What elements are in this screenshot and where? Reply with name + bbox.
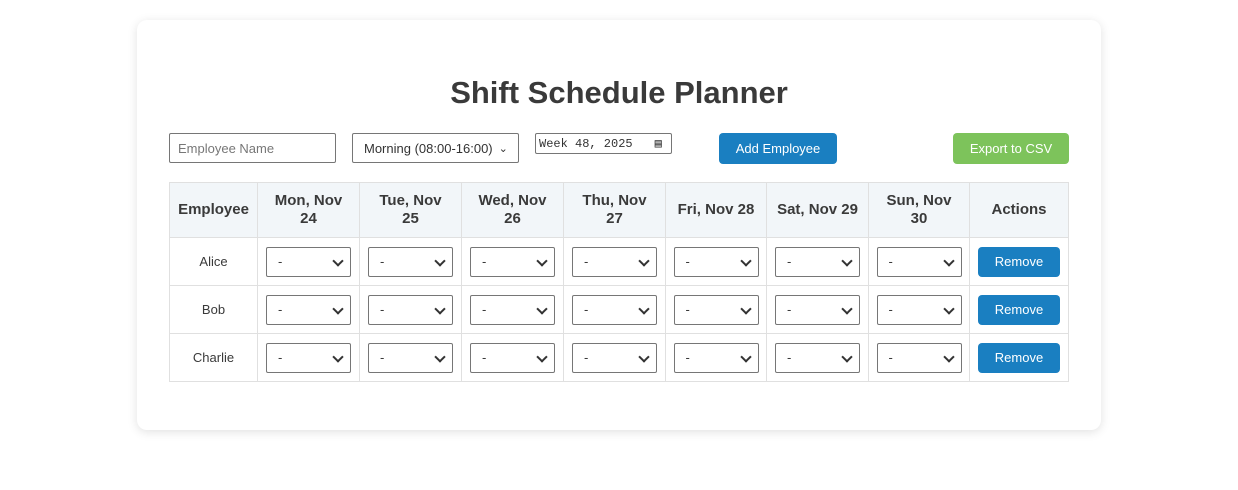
schedule table: - [888,254,893,268]
title: Shift Schedule Planner [450,75,788,110]
schedule table: - [787,350,791,364]
schedule table: Thu, Nov [582,192,647,209]
schedule table: 30 [911,210,927,227]
schedule table: - [278,302,282,316]
schedule table: - [584,254,588,268]
schedule table: Bob [202,302,225,317]
button: export csv [953,133,1069,164]
schedule table: 26 [504,210,521,227]
schedule table: - [482,350,486,364]
schedule table: Remove [995,254,1043,268]
schedule table: - [584,302,588,316]
input: week: ▤ [655,137,662,151]
button: add employee [719,133,837,164]
input: week [535,133,672,154]
schedule table: Remove [995,302,1043,316]
schedule table: 27 [606,210,623,227]
schedule table: - [888,302,893,316]
schedule table: Actions [991,201,1046,218]
select: shift [352,133,519,163]
button: export csv: Export to CSV [970,141,1052,156]
button: add employee: Add Employee [736,141,820,156]
schedule table: Tue, Nov [379,192,442,209]
schedule table: 24 [300,210,317,227]
schedule table: Sat, Nov 29 [777,201,858,218]
select: shift: Morning (08:00-16:00) [364,140,493,156]
schedule table: Mon, Nov [275,192,342,209]
schedule table: - [278,254,282,268]
select: shift: ⌄ [499,142,508,154]
schedule table: - [584,350,588,364]
schedule table: Sun, Nov [886,192,952,209]
schedule table: - [787,254,791,268]
schedule table: - [380,254,384,268]
schedule table: - [686,350,690,364]
schedule table: Alice [199,254,228,269]
schedule table: - [380,302,384,316]
input: employee name: Employee Name [178,140,274,156]
schedule table: Remove [995,350,1043,364]
schedule table: Charlie [193,350,234,365]
schedule table: - [787,302,791,316]
schedule table: - [278,350,282,364]
schedule table: - [686,302,690,316]
schedule table: - [888,350,893,364]
schedule table: - [380,350,384,364]
input: employee name [169,133,336,163]
input: week: Week 48, 2025 [539,136,633,150]
schedule table: - [482,254,486,268]
schedule table: - [482,302,486,316]
schedule table [169,182,1069,382]
card panel [137,20,1101,430]
schedule table: Wed, Nov [478,192,547,209]
schedule table: - [686,254,690,268]
schedule table: 25 [402,210,419,227]
schedule table: Fri, Nov 28 [678,201,754,218]
schedule table: Employee [178,201,249,218]
